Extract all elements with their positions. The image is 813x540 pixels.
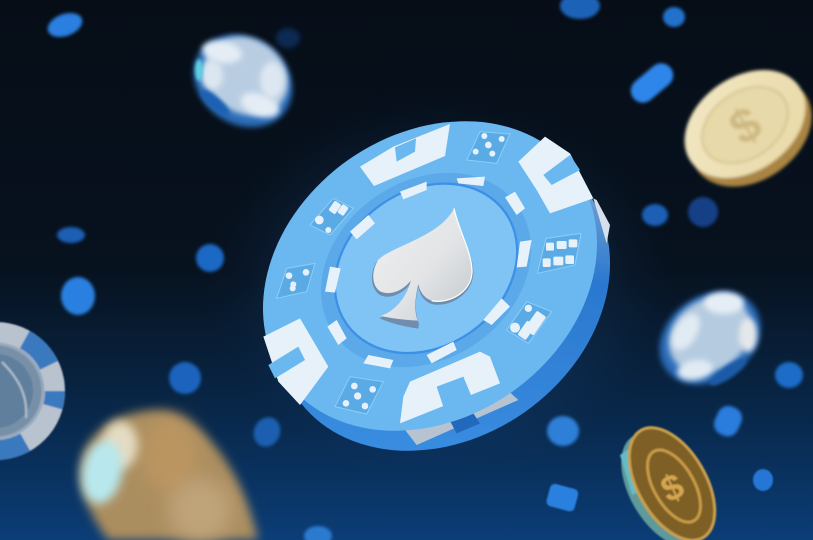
gold coin, bottom right [604,413,732,540]
gold coin, top right [664,48,813,209]
poker chip, left edge [0,322,65,460]
edge block notches [268,138,580,412]
blurred white chip, right [642,273,778,403]
ring white dashes [325,177,532,368]
blurred white chip, top left [176,16,310,146]
main blue poker chip [203,58,670,514]
gold coin, top right: $ [721,97,771,156]
gold coin, bottom right: $ [654,465,690,510]
blurred gold coin, bottom left [77,410,258,540]
dice markings [277,132,581,414]
chip rim [216,78,670,514]
inner ring [283,133,569,407]
chip top face [203,58,657,494]
rim white stripes [400,198,610,445]
white edge blocks [263,124,593,423]
icon: silver spade [372,208,473,329]
chip glow [205,90,675,490]
center disc [302,149,550,388]
